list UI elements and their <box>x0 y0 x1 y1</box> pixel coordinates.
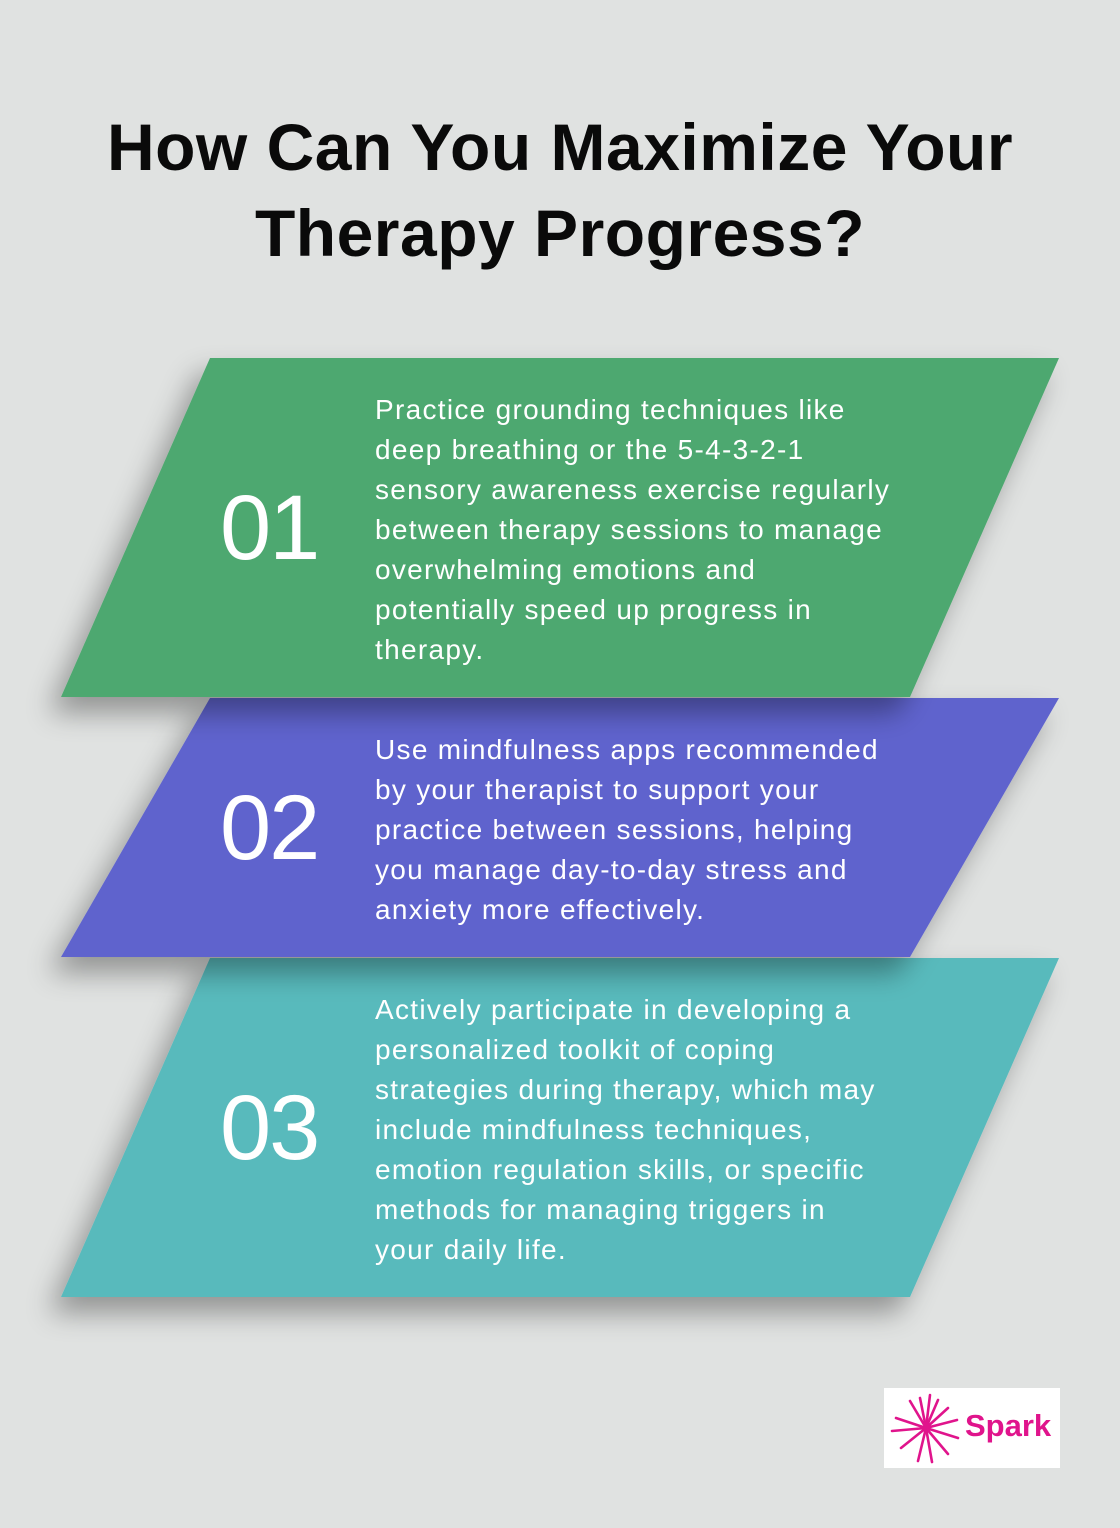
text 3: include mindfulness techniques, <box>375 1114 812 1145</box>
logo text: Spark <box>965 1408 1051 1443</box>
text 3: strategies during therapy, which may <box>375 1074 876 1105</box>
text 2 <box>375 734 879 925</box>
text 3 <box>375 994 876 1265</box>
text 1: therapy. <box>375 634 484 665</box>
text 1: sensory awareness exercise regularly <box>375 474 890 505</box>
text 1: deep breathing or the 5-4-3-2-1 <box>375 434 804 465</box>
panel: step 3 <box>220 994 876 1265</box>
number 02: 02 <box>220 777 318 879</box>
text 2: anxiety more effectively. <box>375 894 705 925</box>
panel: step 2 <box>220 734 879 925</box>
title: Therapy Progress? <box>255 196 865 270</box>
text 3: your daily life. <box>375 1234 567 1265</box>
text 3: methods for managing triggers in <box>375 1194 826 1225</box>
text 1: Practice grounding techniques like <box>375 394 846 425</box>
text 1 <box>375 394 890 665</box>
title: How Can You Maximize Your <box>107 110 1013 184</box>
text 3: personalized toolkit of coping <box>375 1034 775 1065</box>
text 2: by your therapist to support your <box>375 774 819 805</box>
text 3: Actively participate in developing a <box>375 994 851 1025</box>
number 01: 01 <box>220 477 318 579</box>
text 2: Use mindfulness apps recommended <box>375 734 879 765</box>
logo: Spark <box>884 1388 1060 1468</box>
text 1: overwhelming emotions and <box>375 554 756 585</box>
text 2: you manage day-to-day stress and <box>375 854 848 885</box>
number 03: 03 <box>220 1077 318 1179</box>
icon: starburst <box>890 1394 960 1464</box>
text 1: between therapy sessions to manage <box>375 514 883 545</box>
text 2: practice between sessions, helping <box>375 814 853 845</box>
text 3: emotion regulation skills, or specific <box>375 1154 865 1185</box>
text 1: potentially speed up progress in <box>375 594 812 625</box>
title <box>107 110 1013 270</box>
panel: step 1 <box>220 394 890 665</box>
